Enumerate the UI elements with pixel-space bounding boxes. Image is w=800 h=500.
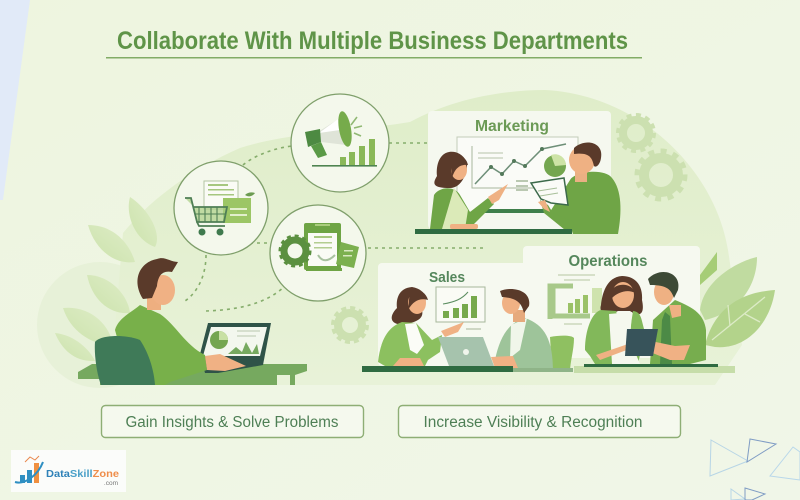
man at desk	[78, 258, 307, 385]
left leaves	[55, 197, 157, 361]
hands	[205, 354, 246, 371]
panel: Operations	[523, 246, 735, 373]
sales desk	[362, 366, 513, 372]
woman presenter	[430, 152, 508, 229]
panel: Marketing	[415, 111, 620, 234]
right leaves	[700, 252, 775, 347]
label: Gain Insights: Gain Insights & Solve Problems	[126, 414, 339, 431]
panel: Operations: Operations	[568, 253, 648, 270]
logo: DataSkillZone: DataSkillZone	[46, 468, 119, 480]
background left circle	[37, 262, 163, 388]
tablet	[625, 329, 658, 356]
decorative triangles	[710, 439, 800, 500]
logo: DataSkillZone	[11, 450, 126, 492]
title: Collaborate With Multiple Business Departments	[117, 27, 628, 55]
marketing desk	[415, 229, 572, 234]
chair	[95, 336, 155, 385]
body	[115, 305, 207, 385]
gears	[333, 115, 685, 342]
logo: DataSkillZone: .com	[104, 480, 118, 487]
dashed connectors	[185, 143, 485, 311]
icon: megaphone circle	[291, 94, 389, 192]
operations desk	[574, 364, 735, 373]
background corner accent	[0, 0, 30, 200]
man sales	[491, 289, 553, 372]
chair	[550, 336, 574, 372]
background green blob	[110, 90, 742, 385]
panel: Sales	[362, 263, 574, 372]
label: Increase Visibility	[398, 406, 680, 438]
woman sales	[378, 287, 464, 366]
panel: Sales: Sales	[429, 269, 465, 286]
desk	[78, 364, 307, 385]
icon: operations gear circle	[270, 205, 366, 301]
man with tablet	[645, 272, 706, 364]
icon: shopping cart circle	[174, 161, 268, 255]
woman with tablet	[585, 276, 645, 364]
laptop	[438, 337, 494, 366]
man with clipboard	[531, 143, 620, 234]
panel: Marketing: Marketing	[475, 118, 549, 135]
label: Increase Visibility: Increase Visibility & Recognition	[424, 414, 642, 431]
head	[147, 294, 161, 310]
laptop	[200, 323, 271, 373]
label: Gain Insights	[102, 406, 364, 438]
